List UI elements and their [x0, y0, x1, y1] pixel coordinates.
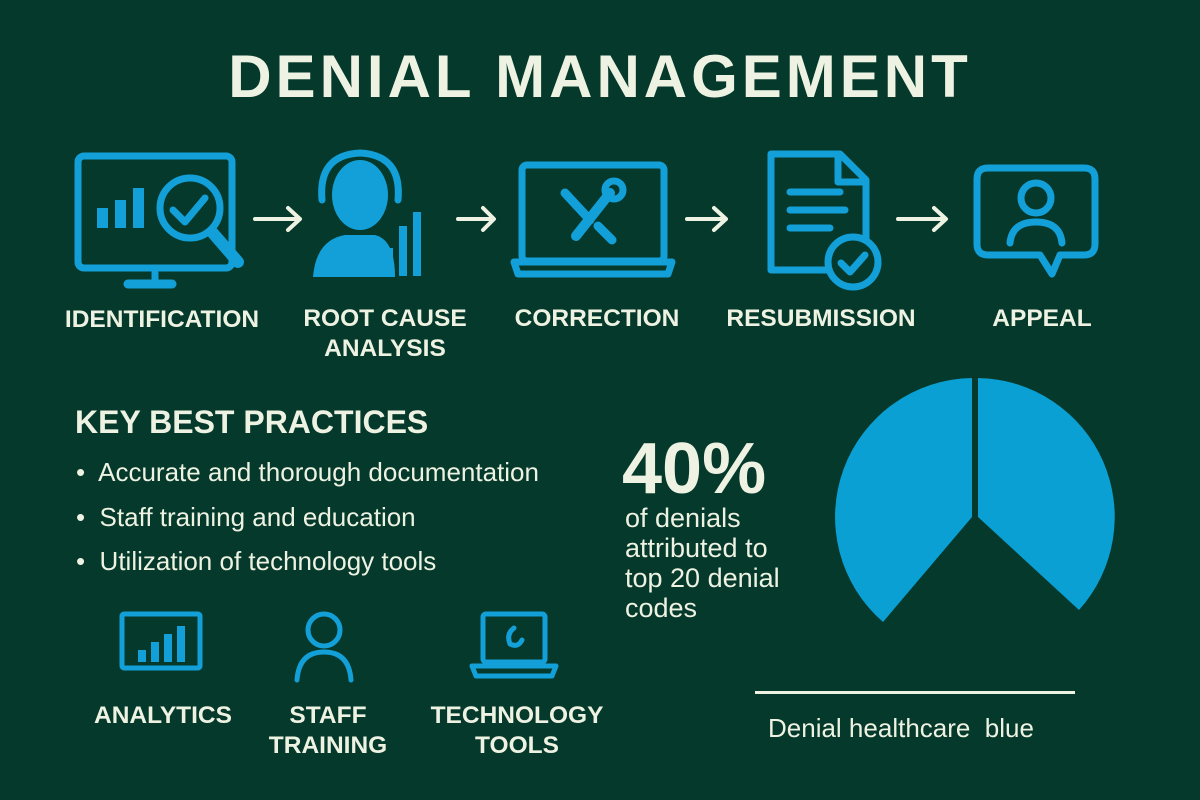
icon: staff	[297, 614, 351, 680]
arrow 1	[255, 208, 300, 230]
icon: document with check	[771, 154, 878, 287]
icon: chat with person	[977, 168, 1095, 274]
stat description	[625, 503, 780, 623]
text: ROOT CAUSE	[303, 305, 467, 332]
arrow 2	[458, 208, 494, 230]
arrow 3	[687, 208, 726, 230]
step labels	[65, 305, 1092, 362]
bullet list	[76, 457, 539, 576]
icon: person with headset	[313, 153, 421, 277]
bullet list: • Accurate and thorough documentation	[76, 457, 539, 487]
text: STAFF	[289, 702, 367, 729]
process flow icons	[74, 150, 1098, 290]
stat: 40%: 40%	[622, 429, 766, 509]
icon: technology laptop	[472, 614, 556, 676]
text: TOOLS	[475, 732, 559, 759]
text: ANALYSIS	[324, 335, 446, 362]
text: APPEAL	[992, 305, 1092, 332]
stat description: top 20 denial	[625, 563, 780, 593]
stat description: codes	[625, 593, 697, 623]
bullet list: • Utilization of technology tools	[76, 546, 436, 576]
text: CORRECTION	[515, 305, 679, 332]
text: ANALYTICS	[94, 702, 232, 729]
bullet list: • Staff training and education	[76, 502, 416, 532]
legend text: Denial healthcare blue	[768, 713, 1034, 743]
small icons	[120, 612, 558, 682]
icon: monitor with magnifier	[78, 156, 238, 284]
text: IDENTIFICATION	[65, 306, 259, 333]
text: TRAINING	[269, 732, 387, 759]
icon: analytics	[122, 614, 200, 668]
title: DENIAL MANAGEMENT	[228, 43, 972, 110]
stat description: attributed to	[625, 533, 768, 563]
legend line	[755, 691, 1075, 694]
text: TECHNOLOGY	[431, 702, 603, 729]
icon: laptop with tools	[514, 165, 672, 274]
heading: key best practices: KEY BEST PRACTICES	[75, 404, 428, 440]
text: RESUBMISSION	[726, 305, 916, 332]
arrow 4	[898, 208, 946, 230]
stat description: of denials	[625, 503, 741, 533]
small icon labels	[94, 702, 603, 759]
